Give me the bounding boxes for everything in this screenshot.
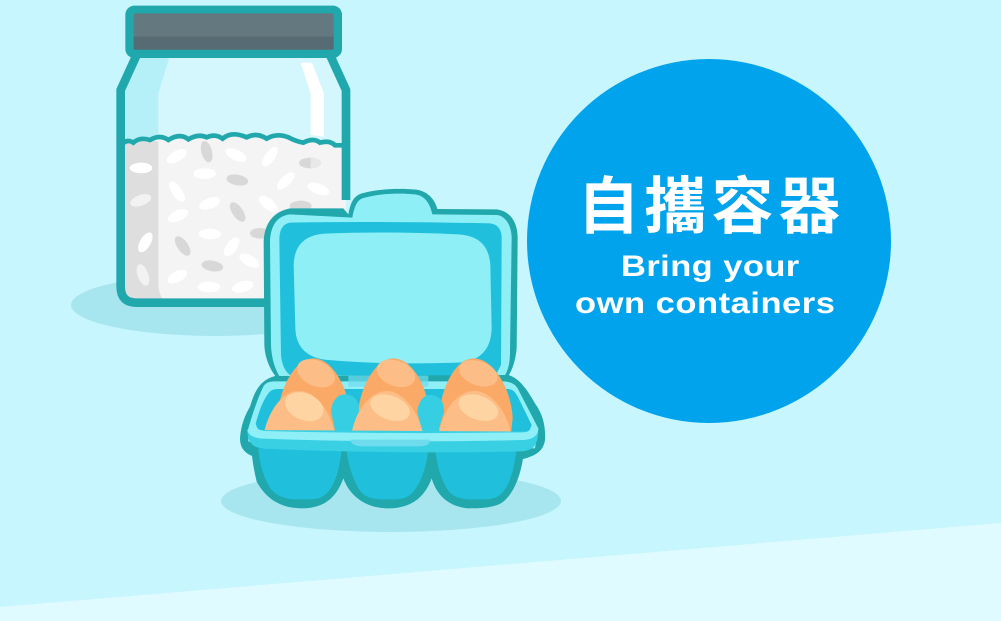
subtitle: English <box>575 249 835 319</box>
front eggs <box>264 391 335 433</box>
subtitle: English: own containers <box>575 286 835 319</box>
back eggs <box>278 358 350 433</box>
icon: glass jar of rice <box>121 6 346 303</box>
carton lid <box>264 189 518 383</box>
blue circle badge <box>527 59 891 423</box>
carton shadow <box>221 470 561 532</box>
rice grains <box>130 145 331 295</box>
carton tray front <box>247 424 538 508</box>
jar glass <box>121 55 346 303</box>
carton tray back <box>240 375 545 459</box>
dividers <box>331 394 359 433</box>
eggs <box>264 354 513 433</box>
subtitle: English: Bring your <box>621 249 800 282</box>
icon: egg carton <box>240 189 545 508</box>
glass highlight <box>301 63 324 137</box>
jar lid <box>125 6 342 58</box>
jar shadow <box>71 274 359 336</box>
rice surface line <box>121 134 346 145</box>
title: Chinese: 自攜容器 <box>577 173 846 242</box>
rice fill <box>121 134 346 303</box>
jar outline <box>121 55 346 303</box>
